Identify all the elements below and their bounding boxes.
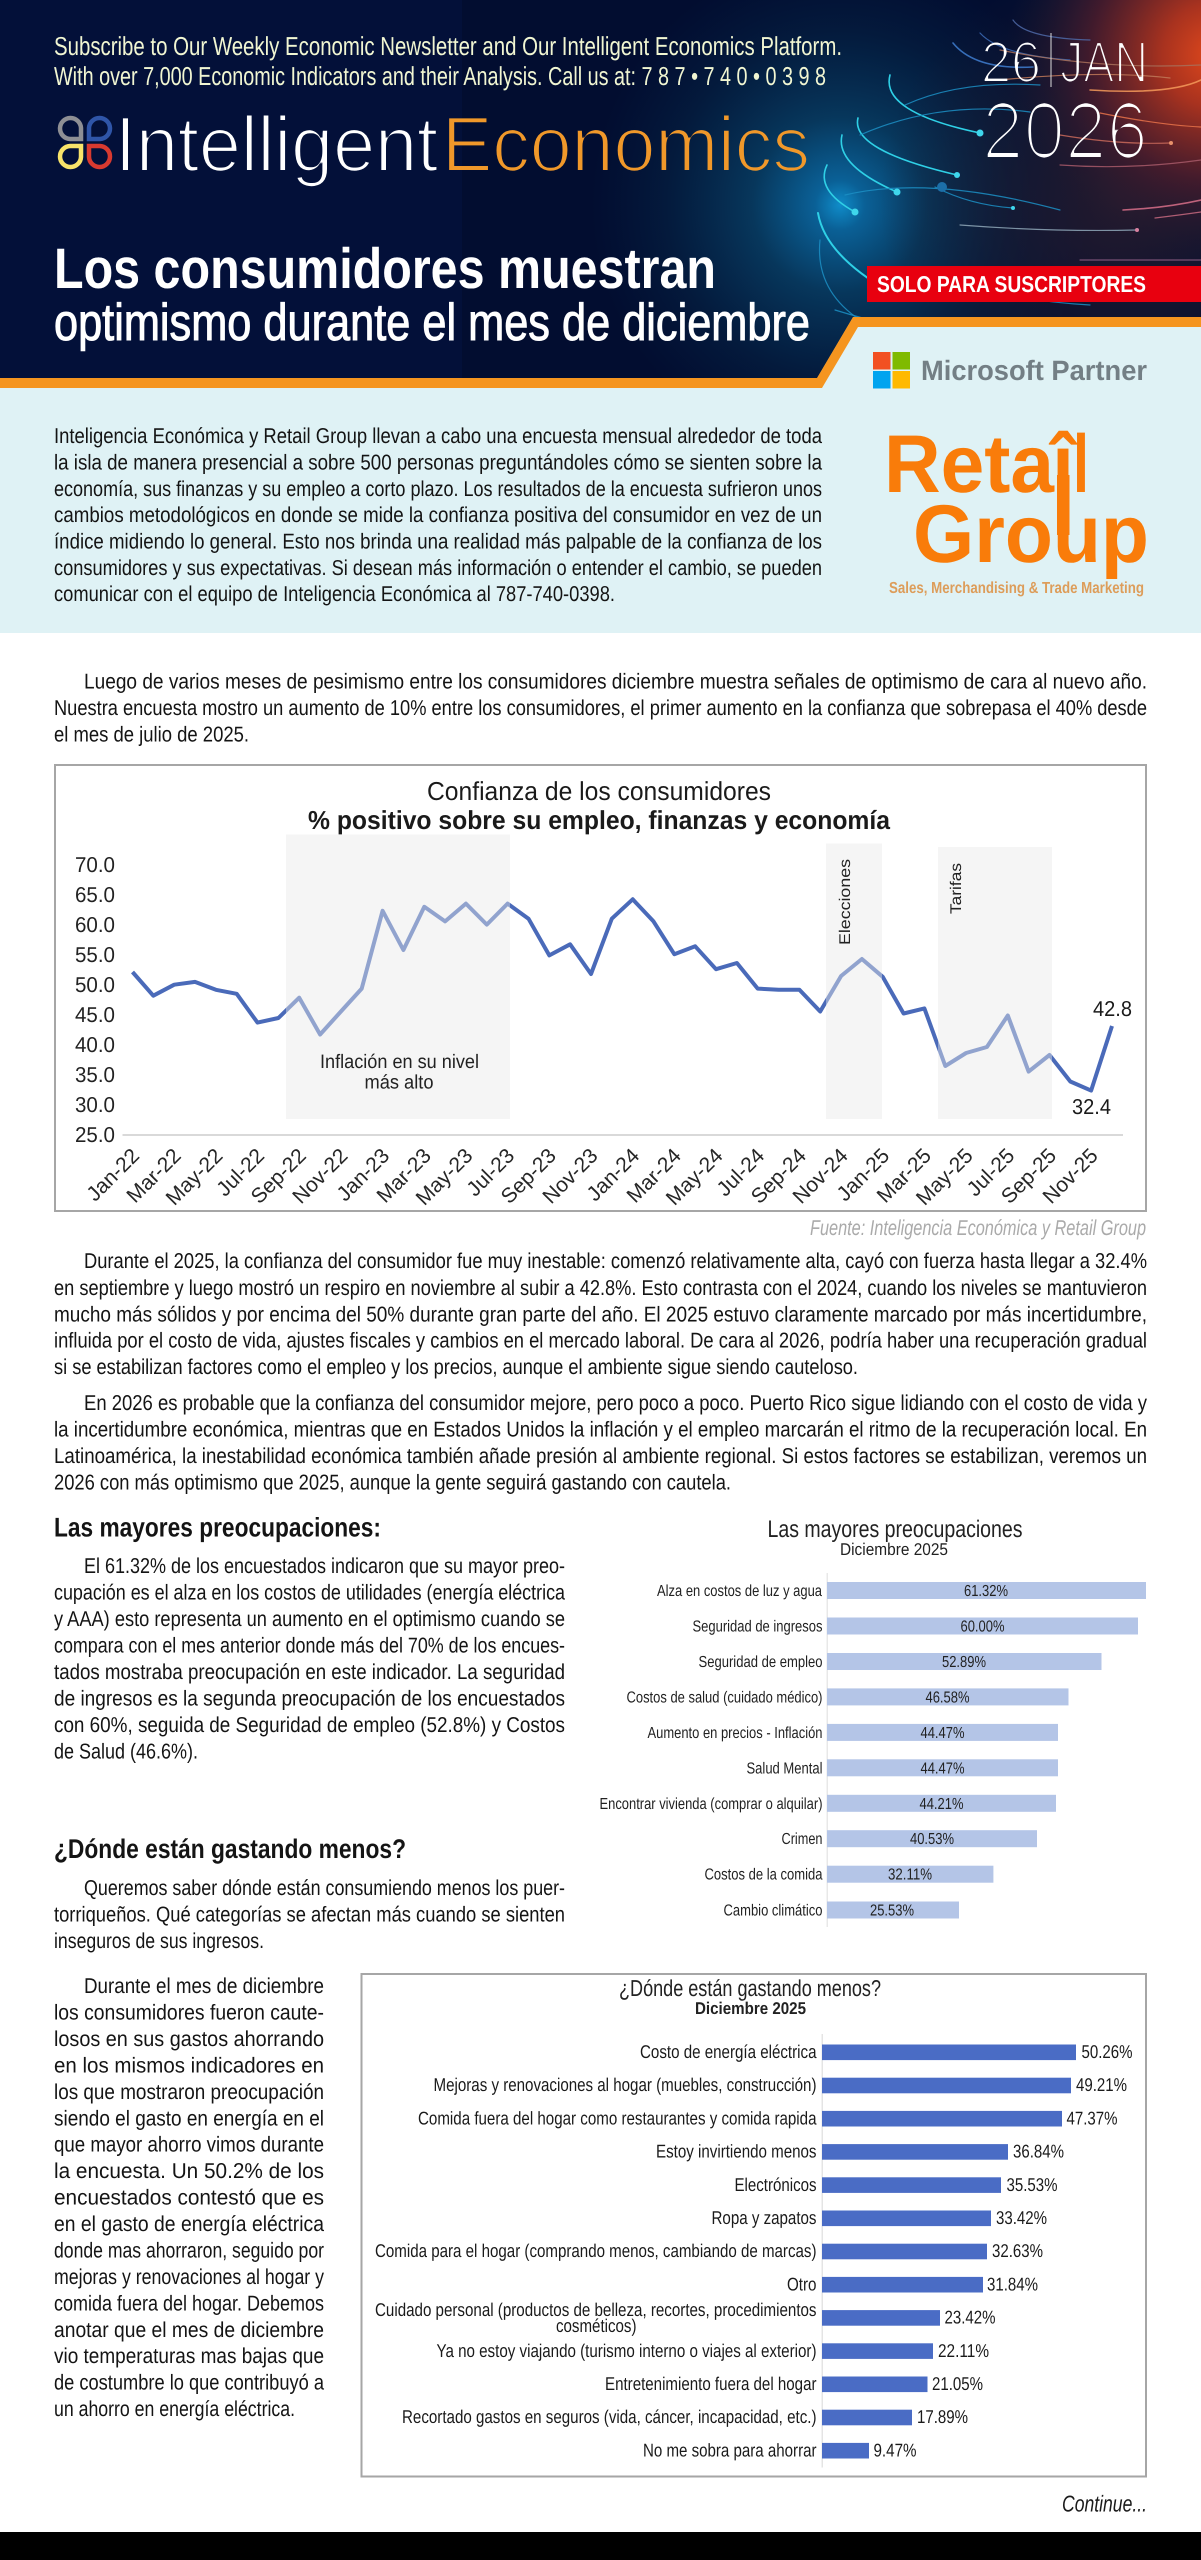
date: JAN xyxy=(1060,30,1148,95)
paragraph: queremos saber: Queremos saber dónde están consumiendo menos los puer- xyxy=(84,1876,565,1900)
chart title: Confianza de los consumidores xyxy=(427,776,771,806)
value labels: 40.53% xyxy=(910,1831,954,1848)
value labels: 9.47% xyxy=(874,2439,916,2460)
logo: Retail Group: Sales, Merchandising & Trade Marketing xyxy=(889,580,1144,597)
annotation: inflación xyxy=(320,1051,479,1094)
data labels: 32.4 xyxy=(1072,1095,1111,1119)
category labels: Costos de salud (cuidado médico) xyxy=(626,1689,822,1706)
x axis labels: Nov-25 xyxy=(1038,1144,1103,1208)
paragraph: durante el mes de diciembre: vio temperaturas mas bajas que xyxy=(54,2344,324,2368)
x axis labels: May-24 xyxy=(662,1144,728,1210)
category labels: Salud Mental xyxy=(746,1760,822,1777)
x axis labels: Sep-25 xyxy=(997,1144,1061,1208)
paragraph: preocupaciones: compara con el mes anterior donde más del 70% de los encues- xyxy=(54,1634,565,1658)
icon: four petal logo xyxy=(60,118,110,167)
chart title: Diciembre 2025 xyxy=(695,1999,806,2018)
date xyxy=(981,30,1148,175)
chart title xyxy=(308,776,891,835)
logo wordmark xyxy=(115,100,810,188)
intro text: comunicar con el equipo de Inteligencia Económica al 787-740-0398. xyxy=(54,582,615,606)
category labels: Aumento en precios - Inflación xyxy=(648,1725,822,1742)
paragraph: durante el mes de diciembre: siendo el gasto en energía en el xyxy=(54,2106,324,2130)
heading: donde estan gastando menos: ¿Dónde están gastando menos? xyxy=(54,1834,406,1864)
paragraph: preocupaciones: El 61.32% de los encuestados indicaron que su mayor preo- xyxy=(84,1554,565,1578)
paragraph: durante el mes de diciembre: los que mostraron preocupación xyxy=(54,2080,324,2104)
logo wordmark: Intelligent xyxy=(115,100,438,188)
annotation: inflación: Inflación en su nivel xyxy=(320,1051,479,1073)
x axis labels: Nov-24 xyxy=(788,1144,853,1208)
heading: las mayores preocupaciones: Las mayores preocupaciones: xyxy=(54,1513,381,1543)
annotation: inflación: más alto xyxy=(364,1072,434,1094)
value labels: 21.05% xyxy=(932,2373,983,2394)
intro text: Inteligencia Económica y Retail Group llevan a cabo una encuesta mensual alrededor de toda xyxy=(54,424,822,448)
data line xyxy=(132,899,1112,1091)
category labels: cosméticos) xyxy=(556,2315,636,2336)
paragraph: preocupaciones: y AAA) esto representa un aumento en el optimismo cuando se xyxy=(54,1607,565,1631)
y axis labels: 60.0 xyxy=(75,913,115,937)
category labels: Estoy invirtiendo menos xyxy=(656,2141,816,2162)
value labels: 36.84% xyxy=(1013,2141,1064,2162)
date: 26 xyxy=(981,30,1041,95)
value labels: 52.89% xyxy=(942,1654,986,1671)
title: Los consumidores muestran xyxy=(54,237,716,301)
paragraph: durante el 2025: si se estabilizan factores como el empleo y los precios, aunque el ambiente sigue siendo cauteloso. xyxy=(54,1355,858,1379)
shaded band: tarifas xyxy=(938,847,1052,1119)
category labels: Comida para el hogar (comprando menos, cambiando de marcas) xyxy=(375,2240,816,2261)
bars xyxy=(822,2044,1076,2458)
logo: Retail Group: Reta xyxy=(884,419,1055,510)
value labels xyxy=(874,2041,1132,2460)
paragraph: en 2026: 2026 con más optimismo que 2025, aunque la gente seguirá gastando con cautela. xyxy=(54,1470,731,1494)
value labels: 60.00% xyxy=(960,1618,1004,1636)
intro text: consumidores y sus expectativas. Si desean más información o entender el cambio, se pueden xyxy=(54,556,822,580)
value labels xyxy=(870,1583,1008,1920)
x axis labels xyxy=(82,1144,1103,1210)
footer bar xyxy=(0,2532,1201,2560)
y axis labels: 35.0 xyxy=(75,1063,115,1087)
paragraph: durante el mes de diciembre: donde mas ahorraron, seguido por xyxy=(54,2238,324,2262)
line chart: confianza de los consumidores xyxy=(55,765,1146,1211)
value labels: 31.84% xyxy=(987,2273,1038,2294)
value labels: 61.32% xyxy=(964,1583,1008,1600)
x axis labels: May-22 xyxy=(162,1144,227,1210)
category labels: Otro xyxy=(787,2273,816,2294)
category labels: Encontrar vivienda (comprar o alquilar) xyxy=(600,1796,822,1813)
y axis labels: 70.0 xyxy=(75,853,115,877)
value labels: 23.42% xyxy=(944,2307,996,2328)
paragraph: queremos saber: inseguros de sus ingresos. xyxy=(54,1929,264,1953)
subscribe text: Subscribe to Our Weekly Economic Newsletter and Our Intelligent Economics Platform. xyxy=(54,31,842,61)
logo: Microsoft Partner xyxy=(873,352,1147,388)
category labels: Electrónicos xyxy=(734,2174,816,2195)
paragraph: preocupaciones: cupación es el alza en los costos de utilidades (energía eléctrica xyxy=(54,1580,565,1604)
x axis labels: Jan-24 xyxy=(583,1144,644,1206)
bar chart: donde estan gastando menos xyxy=(362,1974,1146,2476)
value labels: 33.42% xyxy=(996,2207,1047,2228)
category labels: Crimen xyxy=(782,1831,822,1848)
logo: Microsoft Partner: Microsoft Partner xyxy=(921,355,1147,386)
data labels xyxy=(1072,997,1132,1119)
value labels: 32.63% xyxy=(992,2240,1043,2261)
intro text: economía, sus finanzas y su empleo a corto plazo. Los resultados de la encuesta sufrieron unos xyxy=(54,477,822,501)
value labels: 47.37% xyxy=(1066,2107,1118,2128)
paragraph: en 2026 xyxy=(54,1391,1147,1494)
x axis labels: Mar-24 xyxy=(623,1144,686,1208)
x axis labels: Jul-25 xyxy=(963,1144,1019,1201)
paragraph: durante el mes de diciembre xyxy=(54,1974,324,2421)
value labels: 50.26% xyxy=(1082,2041,1132,2062)
x axis labels: Jul-24 xyxy=(713,1144,769,1201)
x axis labels: Sep-24 xyxy=(747,1144,811,1208)
category labels: Costos de la comida xyxy=(704,1867,823,1884)
value labels: 25.53% xyxy=(870,1902,914,1920)
x axis labels: Jul-22 xyxy=(212,1144,269,1201)
x axis labels: Nov-22 xyxy=(288,1144,352,1208)
y axis labels: 55.0 xyxy=(75,943,115,967)
badge: solo para suscriptores xyxy=(867,266,1201,302)
value labels: 35.53% xyxy=(1006,2174,1058,2195)
x axis labels: Sep-22 xyxy=(247,1144,311,1208)
paragraph: durante el mes de diciembre: en los mismos indicadores en xyxy=(54,2053,324,2077)
category labels: Seguridad de ingresos xyxy=(692,1618,822,1636)
category labels: Comida fuera del hogar como restaurantes y comida rapida xyxy=(418,2107,817,2128)
category labels: Cuidado personal (productos de belleza, recortes, procedimientos xyxy=(375,2299,816,2320)
x axis labels: Sep-23 xyxy=(497,1144,561,1208)
paragraph: durante el mes de diciembre: comida fuera del hogar. Debemos xyxy=(54,2291,324,2315)
x axis labels: Mar-25 xyxy=(873,1144,936,1208)
logo: Retail Group xyxy=(884,419,1149,597)
category labels: Entretenimiento fuera del hogar xyxy=(605,2373,816,2394)
x axis labels: May-25 xyxy=(912,1144,978,1210)
subscribe text: With over 7,000 Economic Indicators and their Analysis. Call us at: 7 8 7 • 7 4 0 • 0 3 9 8 xyxy=(54,61,826,91)
y axis labels xyxy=(75,853,115,1147)
category labels: Recortado gastos en seguros (vida, cáncer, incapacidad, etc.) xyxy=(402,2406,816,2427)
category labels: Alza en costos de luz y agua xyxy=(657,1583,822,1600)
logo: Retail Group: l xyxy=(1073,419,1089,510)
y axis labels: 40.0 xyxy=(75,1033,115,1057)
paragraph: durante el 2025 xyxy=(54,1249,1147,1379)
annotation: tarifas: Tarifas xyxy=(948,863,965,914)
paragraph: durante el mes de diciembre: de costumbre lo que contribuyó a xyxy=(54,2371,324,2395)
intro text: índice midiendo lo general. Esto nos brinda una realidad más palpable de la confianza de los xyxy=(54,530,822,554)
logo: Intelligent Economics xyxy=(60,100,810,188)
chart title xyxy=(768,1516,1022,1559)
paragraph: queremos saber: torriqueños. Qué categorías se afectan más cuando se sienten xyxy=(54,1902,565,1926)
chart title: ¿Dónde están gastando menos? xyxy=(619,1975,881,2001)
x axis labels: Jan-22 xyxy=(82,1144,144,1206)
paragraph: preocupaciones: de ingresos es la segunda preocupación de los encuestados xyxy=(54,1686,565,1710)
paragraph: durante el mes de diciembre: los consumidores fueron caute- xyxy=(54,2000,324,2024)
x axis labels: May-23 xyxy=(412,1144,477,1210)
date: 2026 xyxy=(982,86,1148,175)
chart title: Diciembre 2025 xyxy=(840,1540,948,1559)
subscribe text xyxy=(54,31,842,91)
chart title xyxy=(619,1975,881,2018)
y axis labels: 45.0 xyxy=(75,1003,115,1027)
x axis labels: Jan-25 xyxy=(833,1144,894,1206)
paragraph: durante el mes de diciembre: la encuesta. Un 50.2% de los xyxy=(54,2159,324,2183)
x axis labels: Mar-23 xyxy=(373,1144,436,1208)
x axis labels: Jul-23 xyxy=(462,1144,519,1201)
paragraph: preocupaciones xyxy=(54,1554,565,1764)
paragraph: durante el mes de diciembre: encuestados contestó que es xyxy=(54,2186,324,2210)
x axis labels: Jan-23 xyxy=(332,1144,394,1206)
shaded band: elecciones xyxy=(826,844,882,1119)
value labels: 17.89% xyxy=(917,2406,968,2427)
y axis labels: 50.0 xyxy=(75,973,115,997)
panel: intro background xyxy=(0,300,1201,633)
x axis labels: Nov-23 xyxy=(538,1144,603,1208)
paragraph: opening: el mes de julio de 2025. xyxy=(54,723,249,747)
paragraph: durante el mes de diciembre: en el gasto de energía eléctrica xyxy=(54,2212,324,2236)
bar chart: las mayores preocupaciones xyxy=(600,1516,1146,1927)
orange ribbon xyxy=(0,317,1201,388)
paragraph: durante el mes de diciembre: mejoras y renovaciones al hogar y xyxy=(54,2265,324,2289)
category labels xyxy=(375,2041,817,2460)
category labels: Ropa y zapatos xyxy=(712,2207,816,2228)
value labels: 49.21% xyxy=(1076,2074,1127,2095)
category labels: Seguridad de empleo xyxy=(698,1654,823,1671)
chart title: Las mayores preocupaciones xyxy=(768,1516,1022,1543)
category labels: Mejoras y renovaciones al hogar (muebles, construcción) xyxy=(434,2074,816,2095)
badge: solo para suscriptores: SOLO PARA SUSCRIPTORES xyxy=(877,271,1146,297)
paragraph: durante el mes de diciembre: anotar que el mes de diciembre xyxy=(54,2318,324,2342)
value labels: 44.21% xyxy=(920,1796,964,1813)
value labels: 44.47% xyxy=(920,1725,964,1742)
paragraph: preocupaciones: de Salud (46.6%). xyxy=(54,1740,198,1764)
chart title: % positivo sobre su empleo, finanzas y economía xyxy=(308,805,891,835)
intro text: cambios metodológicos en donde se mide la confianza positiva del consumidor en vez de un xyxy=(54,503,822,527)
paragraph: durante el mes de diciembre: losos en sus gastos ahorrando xyxy=(54,2027,324,2051)
paragraph: queremos saber xyxy=(54,1876,565,1953)
intro text: la isla de manera presencial a sobre 500 personas preguntándoles cómo se sienten sobre la xyxy=(54,450,822,474)
intro text xyxy=(54,424,822,606)
paragraph: durante el mes de diciembre: que mayor ahorro vimos durante xyxy=(54,2133,324,2157)
panel: header background xyxy=(0,0,1201,380)
category labels: Costo de energía eléctrica xyxy=(640,2041,817,2062)
value labels: 46.58% xyxy=(926,1689,970,1706)
y axis labels: 65.0 xyxy=(75,883,115,907)
title: optimismo durante el mes de diciembre xyxy=(54,294,810,352)
category labels: Cambio climático xyxy=(724,1902,823,1920)
value labels: 44.47% xyxy=(920,1760,964,1777)
y axis labels: 25.0 xyxy=(75,1123,115,1147)
paragraph: durante el mes de diciembre: un ahorro en energía eléctrica. xyxy=(54,2397,295,2421)
category labels: Ya no estoy viajando (turismo interno o viajes al exterior) xyxy=(436,2340,816,2361)
paragraph: opening xyxy=(54,670,1147,747)
value labels: 32.11% xyxy=(888,1867,932,1884)
value labels: 22.11% xyxy=(938,2340,989,2361)
continue note: Continue... xyxy=(1062,2490,1147,2516)
logo: Retail Group: Group xyxy=(913,489,1149,580)
bars xyxy=(827,1582,1146,1918)
category labels: No me sobra para ahorrar xyxy=(643,2439,816,2460)
paragraph: durante el mes de diciembre: Durante el mes de diciembre xyxy=(84,1974,324,1998)
paragraph: preocupaciones: con 60%, seguida de Seguridad de empleo (52.8%) y Costos xyxy=(54,1713,565,1737)
annotation: elecciones: Elecciones xyxy=(837,859,854,945)
paragraph: preocupaciones: tados mostraba preocupación en este indicador. La seguridad xyxy=(54,1660,565,1684)
x axis labels: Mar-22 xyxy=(122,1144,186,1208)
title xyxy=(54,237,810,352)
shaded band: inflación xyxy=(286,834,510,1119)
category labels xyxy=(600,1583,823,1920)
y axis labels: 30.0 xyxy=(75,1093,115,1117)
data labels: 42.8 xyxy=(1093,997,1132,1021)
logo: Retail Group: î xyxy=(1048,419,1078,510)
logo wordmark: Economics xyxy=(442,100,810,188)
